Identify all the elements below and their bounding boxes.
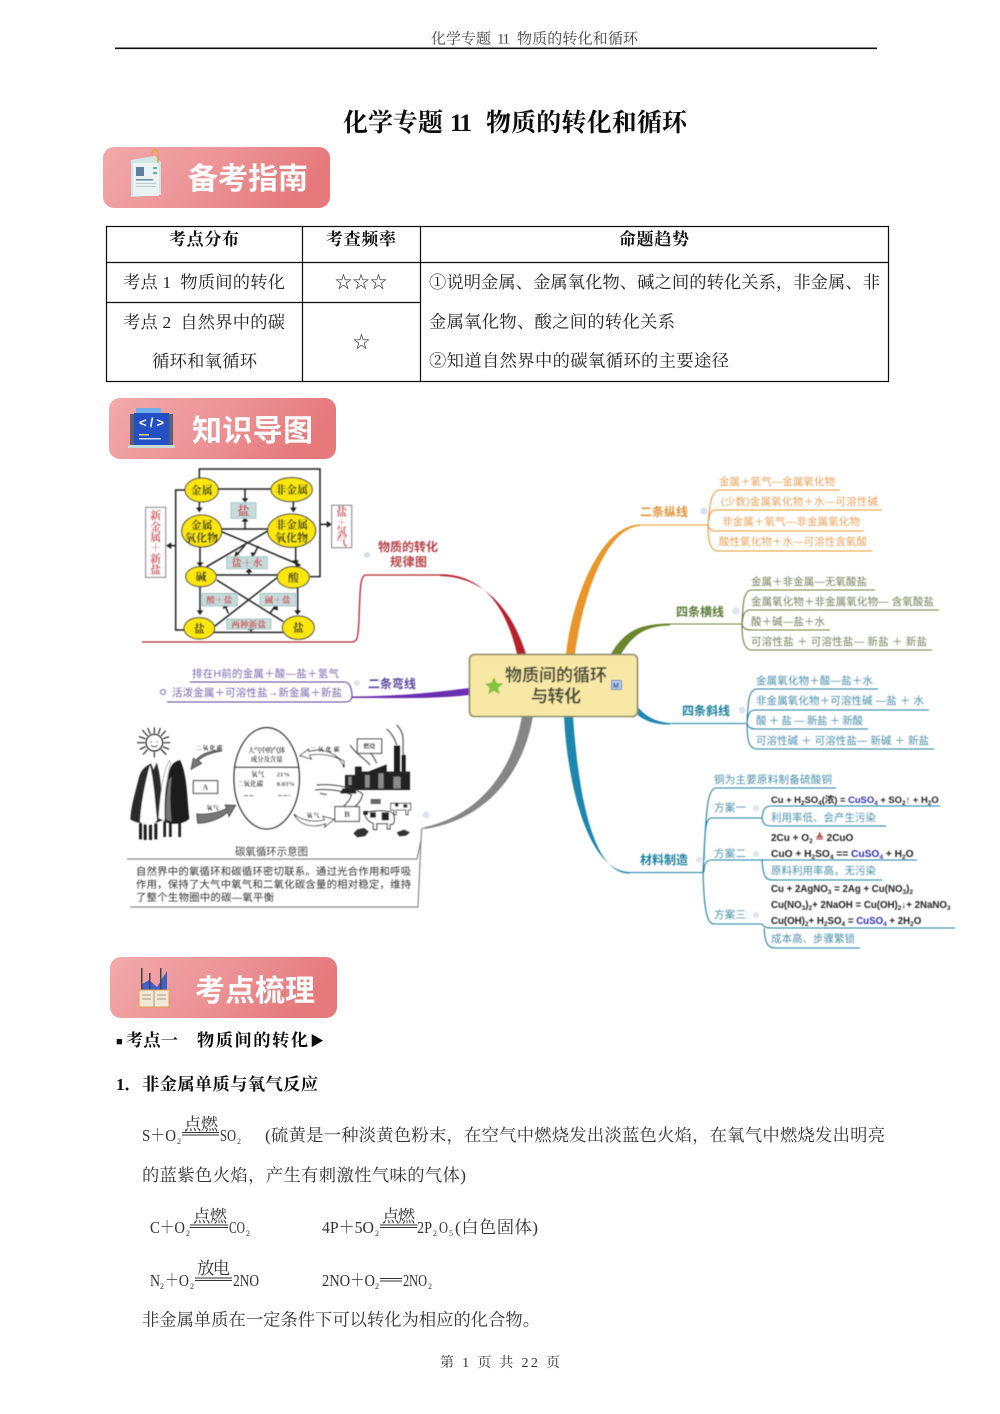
formulas: + H xyxy=(883,849,902,860)
page header xyxy=(115,30,877,49)
branch: 材料制造: 原料利用率高，无污染 xyxy=(771,864,876,877)
banner: 备考指南 xyxy=(103,147,330,208)
formulas: 4 xyxy=(874,800,878,807)
formulas: + SO xyxy=(878,794,902,805)
branch: 二条弯线: 活泼金属＋可溶性盐→新金属＋新盐 xyxy=(172,686,342,699)
banner label: 知识导图 xyxy=(192,415,313,448)
ellipse labels: 金属 xyxy=(191,483,213,497)
branch: 材料制造: 方案三 xyxy=(714,908,746,921)
branch: 四条横线: 可溶性盐 ＋ 可溶性盐— 新盐 ＋ 新盐 xyxy=(751,635,927,648)
branch: 物质的转化规律图: 规律图 xyxy=(390,554,427,569)
equation: nitrogen: 2NO xyxy=(233,1271,259,1290)
formulas: 2 xyxy=(809,838,813,845)
branch: 二条纵线: 二条纵线 xyxy=(640,504,688,519)
diagram: atmosphere ellipse: 0.03% xyxy=(277,781,295,788)
table body: trend: 金属氧化物、酸之间的转化关系 xyxy=(429,312,675,332)
diagram: atmosphere ellipse: 21% xyxy=(277,772,290,779)
central topic xyxy=(470,654,638,716)
branch: 二条纵线: (少数)金属氧化物＋水—可溶性碱 xyxy=(721,495,878,508)
arrow: oxygen from trees xyxy=(197,805,236,823)
table body: frequency stars: ☆☆☆ xyxy=(335,273,387,292)
equation: phosphorus: 2P xyxy=(417,1218,432,1237)
branch: 碳氧循环: 作用，保持了大气中氧气和二氧化碳含量的相对稳定，维持 xyxy=(136,878,411,891)
formulas: ) xyxy=(805,900,809,911)
diagram: atmosphere ellipse: 二氧化碳 xyxy=(237,779,264,788)
diagram: substance transformation xyxy=(146,469,352,639)
equation: nitrogen: 2 xyxy=(190,1282,194,1291)
formulas: 4 xyxy=(842,921,846,928)
sun xyxy=(137,727,170,757)
formulas: ≜ 2CuO xyxy=(815,833,853,844)
trees xyxy=(130,760,189,840)
formulas: O xyxy=(931,794,939,805)
table body: frequency stars xyxy=(335,273,387,352)
branch: 材料制造: 成本高、步骤繁锁 xyxy=(771,932,855,945)
table header row xyxy=(169,229,689,249)
equation: sulfur: SO xyxy=(220,1126,236,1145)
text: sulfur description: (硫黄是一种淡黄色粉末，在空气中燃烧发出淡蓝色火焰，在氧气中燃烧发出明亮 xyxy=(265,1125,885,1145)
diagram: sun, trees and box A: 二氧化碳 xyxy=(196,744,223,752)
formulas: CuSO xyxy=(851,849,879,860)
formulas: CuSO xyxy=(848,794,874,805)
equation: phosphorus: 2 xyxy=(433,1229,437,1238)
section heading: 物质间的转化 xyxy=(197,1030,308,1050)
product labels: 属 xyxy=(150,530,161,544)
formulas: 2 xyxy=(928,800,932,807)
diagram: atmosphere ellipse: 大气中的气体 xyxy=(248,745,286,754)
branch: 四条横线: 金属＋非金属—无氧酸盐 xyxy=(751,575,867,588)
icon: document with paperclip xyxy=(131,150,161,197)
formulas: ↓+ 2NaNO xyxy=(901,900,947,911)
formulas: 2 xyxy=(898,905,902,912)
branch: 四条横线 xyxy=(611,575,939,656)
ellipses xyxy=(182,478,316,639)
box B: B xyxy=(344,809,350,819)
page header: 物质的转化和循环 xyxy=(517,30,639,48)
title: 11 xyxy=(450,110,472,137)
banner: 考点梳理 xyxy=(110,957,337,1018)
section content xyxy=(116,1030,885,1330)
diagram: sun, trees and box A xyxy=(130,727,236,840)
equation: nitrogen: 放电 xyxy=(197,1259,230,1278)
equation: phosphorus: 点燃 xyxy=(382,1207,416,1226)
sub heading: 非金属单质与氧气反应 xyxy=(142,1074,318,1094)
equation: nitric oxide: 2NO＋O xyxy=(322,1271,375,1290)
equation: carbon: 点燃 xyxy=(193,1207,228,1226)
formulas: 3 xyxy=(902,889,906,896)
equation: carbon: C＋O xyxy=(150,1218,185,1237)
diagram: atmosphere ellipse xyxy=(234,728,299,829)
branch: 碳氧循环: 碳氧循环示意图 xyxy=(235,845,308,858)
diagram: sun, trees and box A: 氧气 xyxy=(207,804,219,812)
diagram: atmosphere ellipse: 成分及含量 xyxy=(251,755,283,764)
branch: 材料制造: 材料制造 xyxy=(640,852,688,867)
banner label: 备考指南 xyxy=(188,163,308,196)
icon: star xyxy=(485,677,503,694)
formulas: 2 xyxy=(809,905,813,912)
formulas: 2 xyxy=(805,921,809,928)
branch: 材料制造: 利用率低、会产生污染 xyxy=(771,811,876,824)
product labels: 盐 xyxy=(237,503,250,518)
branch: 二条弯线: 二条弯线 xyxy=(368,676,416,691)
formulas: 4 xyxy=(830,854,834,861)
formulas: 4 xyxy=(883,921,887,928)
ellipse labels: 非金属 xyxy=(275,518,308,532)
branch: 四条斜线: 四条斜线 xyxy=(682,703,730,718)
equation: phosphorus: 5 xyxy=(449,1229,453,1238)
branch: 二条纵线: 酸性氧化物＋水—可溶性含氧酸 xyxy=(719,535,868,548)
product labels: ＋ xyxy=(150,542,161,554)
formulas: + 2H xyxy=(887,916,910,927)
equation: phosphorus: O xyxy=(439,1218,448,1237)
table body: exam points xyxy=(123,273,285,371)
title: 化学专题 xyxy=(343,108,443,137)
formulas: 2 xyxy=(801,800,805,807)
equation: sulfur: 2 xyxy=(237,1137,241,1146)
label boxes xyxy=(202,503,296,629)
formulas xyxy=(771,794,951,928)
icon: map note xyxy=(612,680,622,690)
branch: 四条横线: 四条横线 xyxy=(676,604,724,619)
equation: nitric oxide xyxy=(322,1271,432,1291)
ellipse labels: 盐 xyxy=(194,621,206,635)
text: conclusion: 非金属单质在一定条件下可以转化为相应的化合物。 xyxy=(142,1310,540,1330)
formulas: CuSO xyxy=(856,916,884,927)
formulas: Cu(OH) xyxy=(771,916,805,927)
table body: exam points: 考点 1 物质间的转化 xyxy=(123,273,285,292)
ellipse labels xyxy=(185,483,308,635)
formulas: = 2Ag + Cu(NO xyxy=(831,884,903,895)
formulas: ) xyxy=(906,884,909,895)
formulas: O xyxy=(914,916,922,927)
ellipse labels: 盐 xyxy=(293,621,305,635)
branch: 二条纵线: 金属＋氧气—金属氧化物 xyxy=(719,475,835,488)
branch: 二条弯线: 排在H前的金属＋酸—盐＋氢气 xyxy=(192,667,340,680)
product labels: 两种新盐 xyxy=(231,618,267,629)
section heading: 考点一 xyxy=(126,1030,178,1050)
branch: 物质的转化规律图: 物质的转化 xyxy=(378,539,438,554)
ellipse labels: 非金属 xyxy=(275,483,308,497)
formulas: 3 xyxy=(947,905,951,912)
table body: trend: ②知道自然界中的碳氧循环的主要途径 xyxy=(429,352,730,370)
page header: 11 xyxy=(497,32,510,48)
cows and bushes xyxy=(353,799,411,837)
section heading: ■ xyxy=(116,1036,123,1048)
page header: 化学专题 xyxy=(431,30,491,48)
branch: 二条纵线 xyxy=(566,475,882,654)
formulas: + 2NaOH = Cu(OH) xyxy=(812,900,898,911)
equation: nitrogen: 2 xyxy=(160,1282,164,1291)
table body: trend xyxy=(429,273,880,370)
branch: 四条斜线: 酸 ＋ 盐 — 新盐 ＋ 新酸 xyxy=(756,714,864,727)
branch: 碳氧循环: 了整个生物圈中的碳—氧平衡 xyxy=(136,891,274,904)
ellipse labels: 碱 xyxy=(195,570,206,584)
branch: 材料制造: 方案二 xyxy=(714,847,746,860)
table body: frequency stars: ☆ xyxy=(353,333,370,352)
equation: carbon: 2 xyxy=(186,1229,190,1238)
diagram: factory, road, cows and box B xyxy=(294,725,411,837)
product labels: 氢 xyxy=(336,524,347,538)
branch: 碳氧循环 xyxy=(127,716,533,907)
icon: map note: M xyxy=(613,683,619,690)
product labels xyxy=(150,503,348,629)
equation: nitric oxide: 2 xyxy=(375,1282,379,1291)
mind map xyxy=(127,469,955,948)
equation: carbon: CO xyxy=(229,1218,245,1237)
formulas: = xyxy=(845,916,856,927)
formulas: 3 xyxy=(828,889,832,896)
branch: 四条斜线: 金属氧化物＋酸—盐＋水 xyxy=(756,674,874,687)
table body: trend: ①说明金属、金属氧化物、碱之间的转化关系，非金属、非 xyxy=(429,273,880,292)
product labels: 金 xyxy=(150,519,161,533)
formulas: Cu + 2AgNO xyxy=(771,884,828,895)
branch: 碳氧循环: 自然界中的氧循环和碳循环密切联系。通过光合作用和呼吸 xyxy=(136,865,411,878)
formulas: 2Cu + O xyxy=(771,833,809,844)
equation: sulfur: S＋O xyxy=(142,1126,176,1145)
product labels: 盐 xyxy=(150,563,162,577)
equation: sulfur: 2 xyxy=(177,1137,181,1146)
box A: A xyxy=(202,783,208,792)
banner label: 考点梳理 xyxy=(195,975,315,1008)
formulas: SO xyxy=(815,849,830,860)
section heading: ▶ xyxy=(310,1033,324,1049)
formulas: 2 xyxy=(910,921,914,928)
formulas: == xyxy=(833,849,851,860)
formulas: 2 xyxy=(902,800,906,807)
branch: 四条横线: 酸＋碱—盐＋水 xyxy=(751,615,826,628)
formulas: + H xyxy=(809,916,824,927)
formulas: 2 xyxy=(811,854,815,861)
formulas: 4 xyxy=(879,854,883,861)
product labels: 气 xyxy=(336,534,347,548)
central topic: 物质间的循环 xyxy=(505,665,607,685)
equation: carbon: 2 xyxy=(246,1229,250,1238)
diagram: factory, road, cows and box B: 氧气 xyxy=(307,812,320,820)
branch: 四条横线: 金属氧化物＋非金属氧化物— 含氧酸盐 xyxy=(751,595,934,608)
arrow: carbon dioxide from factory xyxy=(300,749,344,768)
formulas: Cu(NO xyxy=(771,900,802,911)
branch: 材料制造 xyxy=(564,716,955,948)
equation: nitrogen: ＋O xyxy=(165,1271,189,1290)
formulas: (浓) = xyxy=(822,794,848,805)
branch: 二条纵线: 非金属＋氧气—非金属氧化物 xyxy=(722,515,860,528)
product labels: 碱＋盐 xyxy=(265,594,292,605)
ellipse labels: 金属 xyxy=(191,518,213,532)
table header row: 考查频率 xyxy=(326,229,397,249)
product labels: ＋ xyxy=(337,518,346,529)
branch: 四条斜线: 可溶性碱 ＋ 可溶性盐— 新碱 ＋ 新盐 xyxy=(756,734,929,747)
equation: nitrogen xyxy=(150,1259,259,1291)
formulas: 2 xyxy=(909,889,913,896)
arrow: oxygen to box B xyxy=(294,814,334,827)
formulas: CuO + H xyxy=(771,849,811,860)
equation: sulfur xyxy=(142,1115,241,1146)
arrow: carbon dioxide to trees xyxy=(191,751,222,769)
formulas: ↑ + H xyxy=(906,794,928,805)
sub heading: 1． xyxy=(116,1075,142,1094)
ellipse labels: 氧化物 xyxy=(185,531,218,545)
formulas: 2 xyxy=(824,921,828,928)
equation: phosphorus: (白色固体) xyxy=(455,1218,538,1237)
diagram: atmosphere ellipse: 氧气 xyxy=(251,770,265,779)
product labels: 盐＋水 xyxy=(232,557,263,570)
formulas: 3 xyxy=(802,905,806,912)
exam table xyxy=(106,226,888,382)
icon: code laptop: </> xyxy=(139,415,164,430)
branch: 物质的转化规律图 xyxy=(142,539,526,654)
table header row: 考点分布 xyxy=(169,229,239,249)
branch: 四条斜线: 非金属氧化物＋可溶性碱 —盐 ＋ 水 xyxy=(756,694,924,707)
equation: nitric oxide: 2NO xyxy=(403,1271,427,1290)
ellipse labels: 酸 xyxy=(288,570,300,584)
product labels: 新 xyxy=(150,508,161,522)
road and car xyxy=(315,785,363,807)
branch: 材料制造: 铜为主要原料制备硫酸铜 xyxy=(714,773,832,786)
title: 物质的转化和循环 xyxy=(486,109,689,137)
table body: exam points: 考点 2 自然界中的碳 xyxy=(123,313,285,332)
formulas: 4 xyxy=(818,800,822,807)
ellipse labels: 氧化物 xyxy=(275,530,308,544)
branch: 二条弯线 xyxy=(160,667,469,702)
formulas: Cu + H xyxy=(771,794,801,805)
icon: code laptop xyxy=(128,408,175,448)
formulas: 2 xyxy=(902,854,906,861)
product labels: 盐 xyxy=(336,505,348,519)
equation: phosphorus xyxy=(322,1207,538,1238)
section heading xyxy=(116,1030,324,1050)
product labels: 新 xyxy=(150,551,161,565)
equation: nitric oxide: 2 xyxy=(428,1282,432,1291)
table header row: 命题趋势 xyxy=(619,229,689,249)
product labels: 酸＋盐 xyxy=(206,594,234,605)
table body: exam points: 循环和氧循环 xyxy=(152,352,258,371)
text: sulfur description xyxy=(142,1125,885,1185)
icon: book with chart xyxy=(139,968,169,1007)
branch: 材料制造: 方案一 xyxy=(714,801,746,814)
equation: phosphorus: 2 xyxy=(375,1229,379,1238)
formulas: SO xyxy=(805,794,818,805)
formulas: SO xyxy=(828,916,842,927)
equation: carbon xyxy=(150,1207,250,1238)
banner: 知识导图 xyxy=(109,398,336,459)
branch: 四条斜线 xyxy=(637,674,934,749)
factory: 燃烧 xyxy=(362,743,375,751)
equation: nitrogen: N xyxy=(150,1271,160,1290)
text: sulfur description: 的蓝紫色火焰，产生有刺激性气味的气体) xyxy=(142,1165,466,1185)
equation: sulfur: 点燃 xyxy=(184,1115,219,1134)
formulas: O xyxy=(906,849,914,860)
title xyxy=(343,108,689,137)
page footer: 第 1 页 共 22 页 xyxy=(440,1355,560,1371)
diagram: factory, road, cows and box B: 二氧化碳 xyxy=(310,746,340,754)
central topic: 与转化 xyxy=(531,686,581,706)
equation: phosphorus: 4P＋5O xyxy=(322,1218,374,1237)
